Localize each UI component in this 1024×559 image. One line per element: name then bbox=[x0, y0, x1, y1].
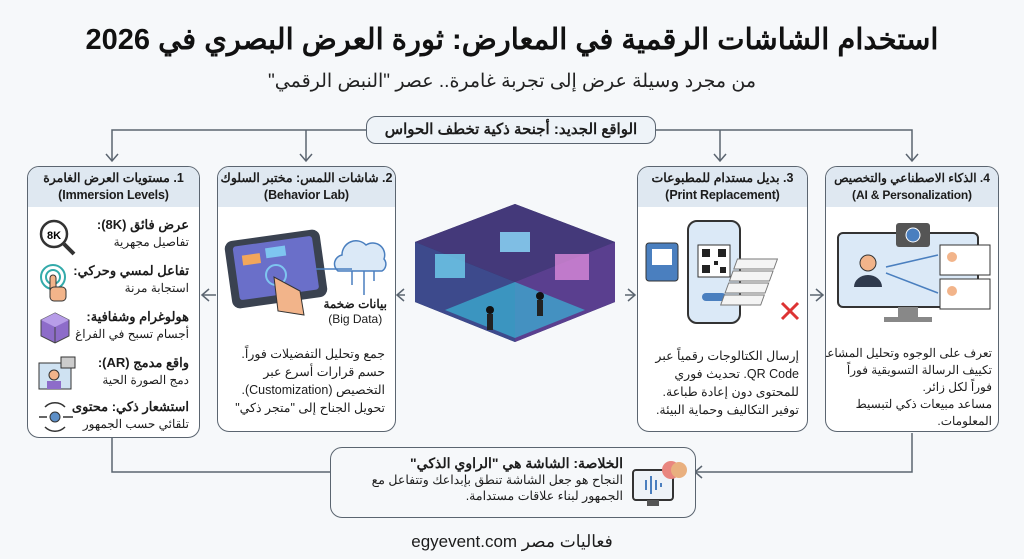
text 2: تحويل الجناح إلى "متجر ذكي" bbox=[235, 401, 385, 415]
item AR: واقع مدمج (AR): bbox=[98, 355, 189, 370]
center illustration: digital booth bbox=[415, 204, 615, 342]
heading 2: (Behavior Lab) bbox=[264, 188, 349, 202]
text 3: إرسال الكتالوجات رقمياً عبر QR Code. تحديث فوري للمحتوى دون إعادة طباعة. bbox=[655, 349, 799, 399]
heading 3: 3. بديل مستدام للمطبوعات bbox=[652, 171, 793, 185]
item AR: دمج الصورة الحية bbox=[102, 373, 189, 387]
heading 1: (Immersion Levels) bbox=[58, 188, 169, 202]
item touch: تفاعل لمسي وحركي: bbox=[73, 263, 189, 278]
footer: فعاليات مصر egyevent.com bbox=[411, 532, 613, 551]
item smart sensing: تلقائي حسب الجمهور bbox=[83, 417, 189, 431]
panel: behavior lab bbox=[217, 166, 396, 432]
item touch bbox=[40, 263, 189, 302]
icon: monitor brain bbox=[632, 461, 687, 506]
conclusion text: النجاح هو جعل الشاشة تنطق بإبداعك وتتفاعل مع الجمهور لبناء علاقات مستدامة. bbox=[372, 473, 623, 503]
heading 3 bbox=[638, 167, 807, 207]
item hologram: هولوغرام وشفافية: bbox=[86, 309, 189, 324]
item smart sensing bbox=[39, 399, 189, 432]
heading 4: (AI & Personalization) bbox=[852, 188, 972, 202]
conclusion text bbox=[372, 455, 623, 503]
panel: print replacement bbox=[637, 166, 808, 432]
subtitle: من مجرد وسيلة عرض إلى تجربة غامرة.. عصر "النبض الرقمي" bbox=[268, 71, 756, 92]
heading 2: 2. شاشات اللمس: مختبر السلوك bbox=[221, 171, 392, 185]
big data label bbox=[323, 297, 387, 326]
panel: immersion levels bbox=[27, 166, 200, 438]
text 4 bbox=[825, 346, 992, 428]
callout: conclusion bbox=[330, 447, 696, 518]
item 8K: تفاصيل مجهرية bbox=[114, 235, 189, 249]
icon: monitor with face recognition bbox=[837, 223, 990, 322]
heading 1: 1. مستويات العرض الغامرة bbox=[43, 171, 184, 185]
top pill: الواقع الجديد: أجنحة ذكية تخطف الحواس bbox=[385, 121, 637, 138]
heading 3: (Print Replacement) bbox=[665, 188, 780, 202]
top pill bbox=[366, 116, 656, 144]
conclusion text: الخلاصة: الشاشة هي "الراوي الذكي" bbox=[410, 455, 623, 471]
item 8K bbox=[40, 217, 189, 256]
text 2 bbox=[235, 345, 385, 415]
title: استخدام الشاشات الرقمية في المعارض: ثورة العرض البصري في 2026 bbox=[86, 24, 938, 56]
text 2: جمع وتحليل التفضيلات فوراً. bbox=[241, 347, 385, 361]
heading 1 bbox=[28, 167, 199, 207]
text 4: المعلومات. bbox=[937, 414, 992, 428]
icon: tablet and cloud bbox=[224, 230, 387, 316]
text 4: تعرف على الوجوه وتحليل المشاعر bbox=[825, 346, 992, 360]
item hologram: أجسام تسبح في الفراغ bbox=[75, 327, 189, 341]
item AR bbox=[38, 355, 189, 390]
text 4: تكييف الرسالة التسويقية فوراً bbox=[847, 363, 992, 377]
text 3: توفير التكاليف وحماية البيئة. bbox=[656, 403, 799, 417]
item hologram bbox=[40, 309, 189, 344]
item touch: استجابة مرنة bbox=[125, 281, 189, 295]
text 4: فوراً لكل زائر. bbox=[922, 380, 992, 394]
panel: AI personalization bbox=[825, 166, 999, 432]
big data label: (Big Data) bbox=[328, 312, 382, 326]
big data label: بيانات ضخمة bbox=[323, 297, 387, 311]
item smart sensing: استشعار ذكي: محتوى bbox=[72, 399, 189, 414]
heading 4 bbox=[826, 167, 998, 207]
text 4: مساعد مبيعات ذكي لتبسيط bbox=[856, 397, 992, 411]
icon: phone qr book papers bbox=[646, 220, 799, 324]
heading 2 bbox=[218, 167, 395, 207]
item 8K: 8K bbox=[47, 230, 61, 242]
text 2: حسم قرارات أسرع عبر التخصيص (Customization). bbox=[241, 365, 385, 397]
item 8K: عرض فائق (8K): bbox=[97, 217, 189, 232]
heading 4: 4. الذكاء الاصطناعي والتخصيص bbox=[834, 171, 990, 185]
